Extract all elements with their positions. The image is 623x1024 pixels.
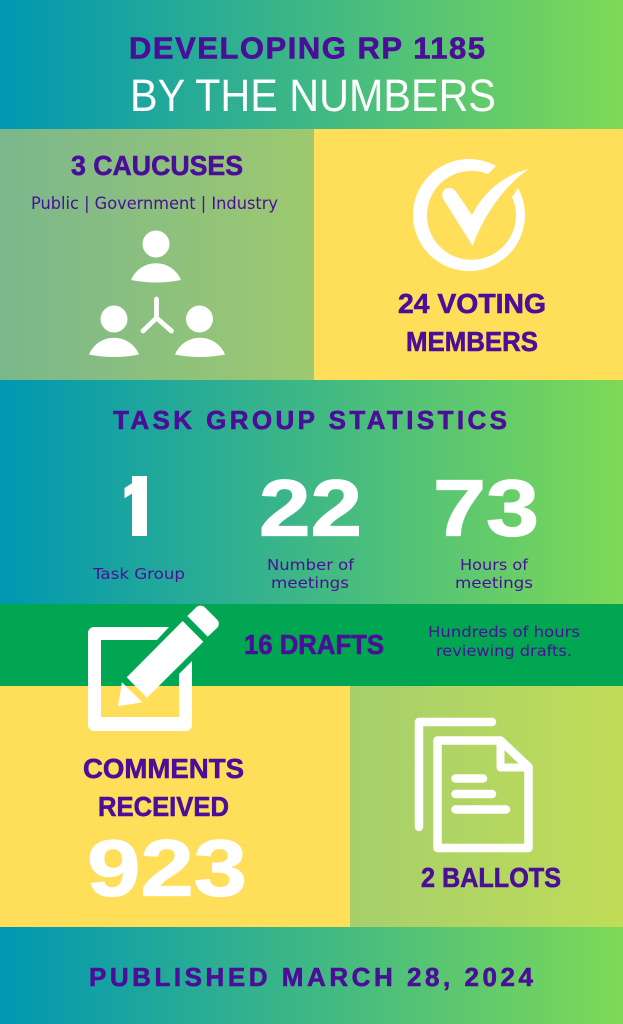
drafts count: 16 DRAFTS [244, 629, 384, 660]
voting members label: 24 VOTING [398, 288, 546, 319]
stat: 1 task group: Task Group [92, 565, 185, 583]
drafts note: reviewing drafts. [436, 642, 572, 660]
stat: 1 task group [92, 476, 184, 582]
stat: 73 hours [433, 464, 539, 592]
stat: 73 hours: meetings [455, 574, 533, 592]
comments label: RECEIVED [98, 791, 229, 822]
comments label: COMMENTS [83, 753, 244, 784]
panel: drafts band [0, 604, 623, 686]
comments number: 923 [87, 824, 247, 912]
stat: 22 meetings [259, 464, 362, 592]
icon: check mark in ring [413, 159, 528, 271]
drafts note: Hundreds of hours [428, 623, 580, 641]
panel: caucuses [0, 129, 314, 380]
stat: 22 meetings: meetings [271, 574, 349, 592]
icon: three connected people [89, 230, 225, 357]
footer band [0, 927, 623, 1024]
drafts note [428, 623, 580, 660]
icon: documents [419, 722, 528, 848]
stat: 73 hours: 73 [433, 464, 539, 552]
stat: 22 meetings: Number of [267, 556, 355, 574]
ballots label: 2 BALLOTS [421, 862, 561, 893]
icon: pencil and checkbox [88, 606, 219, 731]
voting members label [398, 288, 546, 357]
title line 1: DEVELOPING RP 1185 [129, 30, 485, 66]
panel: voting members [314, 129, 623, 380]
statistics heading: TASK GROUP STATISTICS [113, 405, 507, 435]
title line 2: BY THE NUMBERS [130, 70, 496, 121]
panel: ballots [350, 686, 623, 927]
caucuses heading: 3 CAUCUSES [71, 150, 243, 181]
caucuses list: Public | Government | Industry [31, 194, 278, 213]
stat: 1 task group: 1 [120, 462, 165, 554]
comments label [83, 753, 244, 822]
panel: task group statistics [0, 380, 623, 604]
panel: comments received [0, 686, 350, 927]
voting members label: MEMBERS [406, 326, 538, 357]
header band [0, 0, 623, 129]
stat: 22 meetings: 22 [259, 464, 362, 552]
stat: 73 hours: Hours of [460, 556, 529, 574]
publication date: PUBLISHED MARCH 28, 2024 [89, 962, 534, 992]
